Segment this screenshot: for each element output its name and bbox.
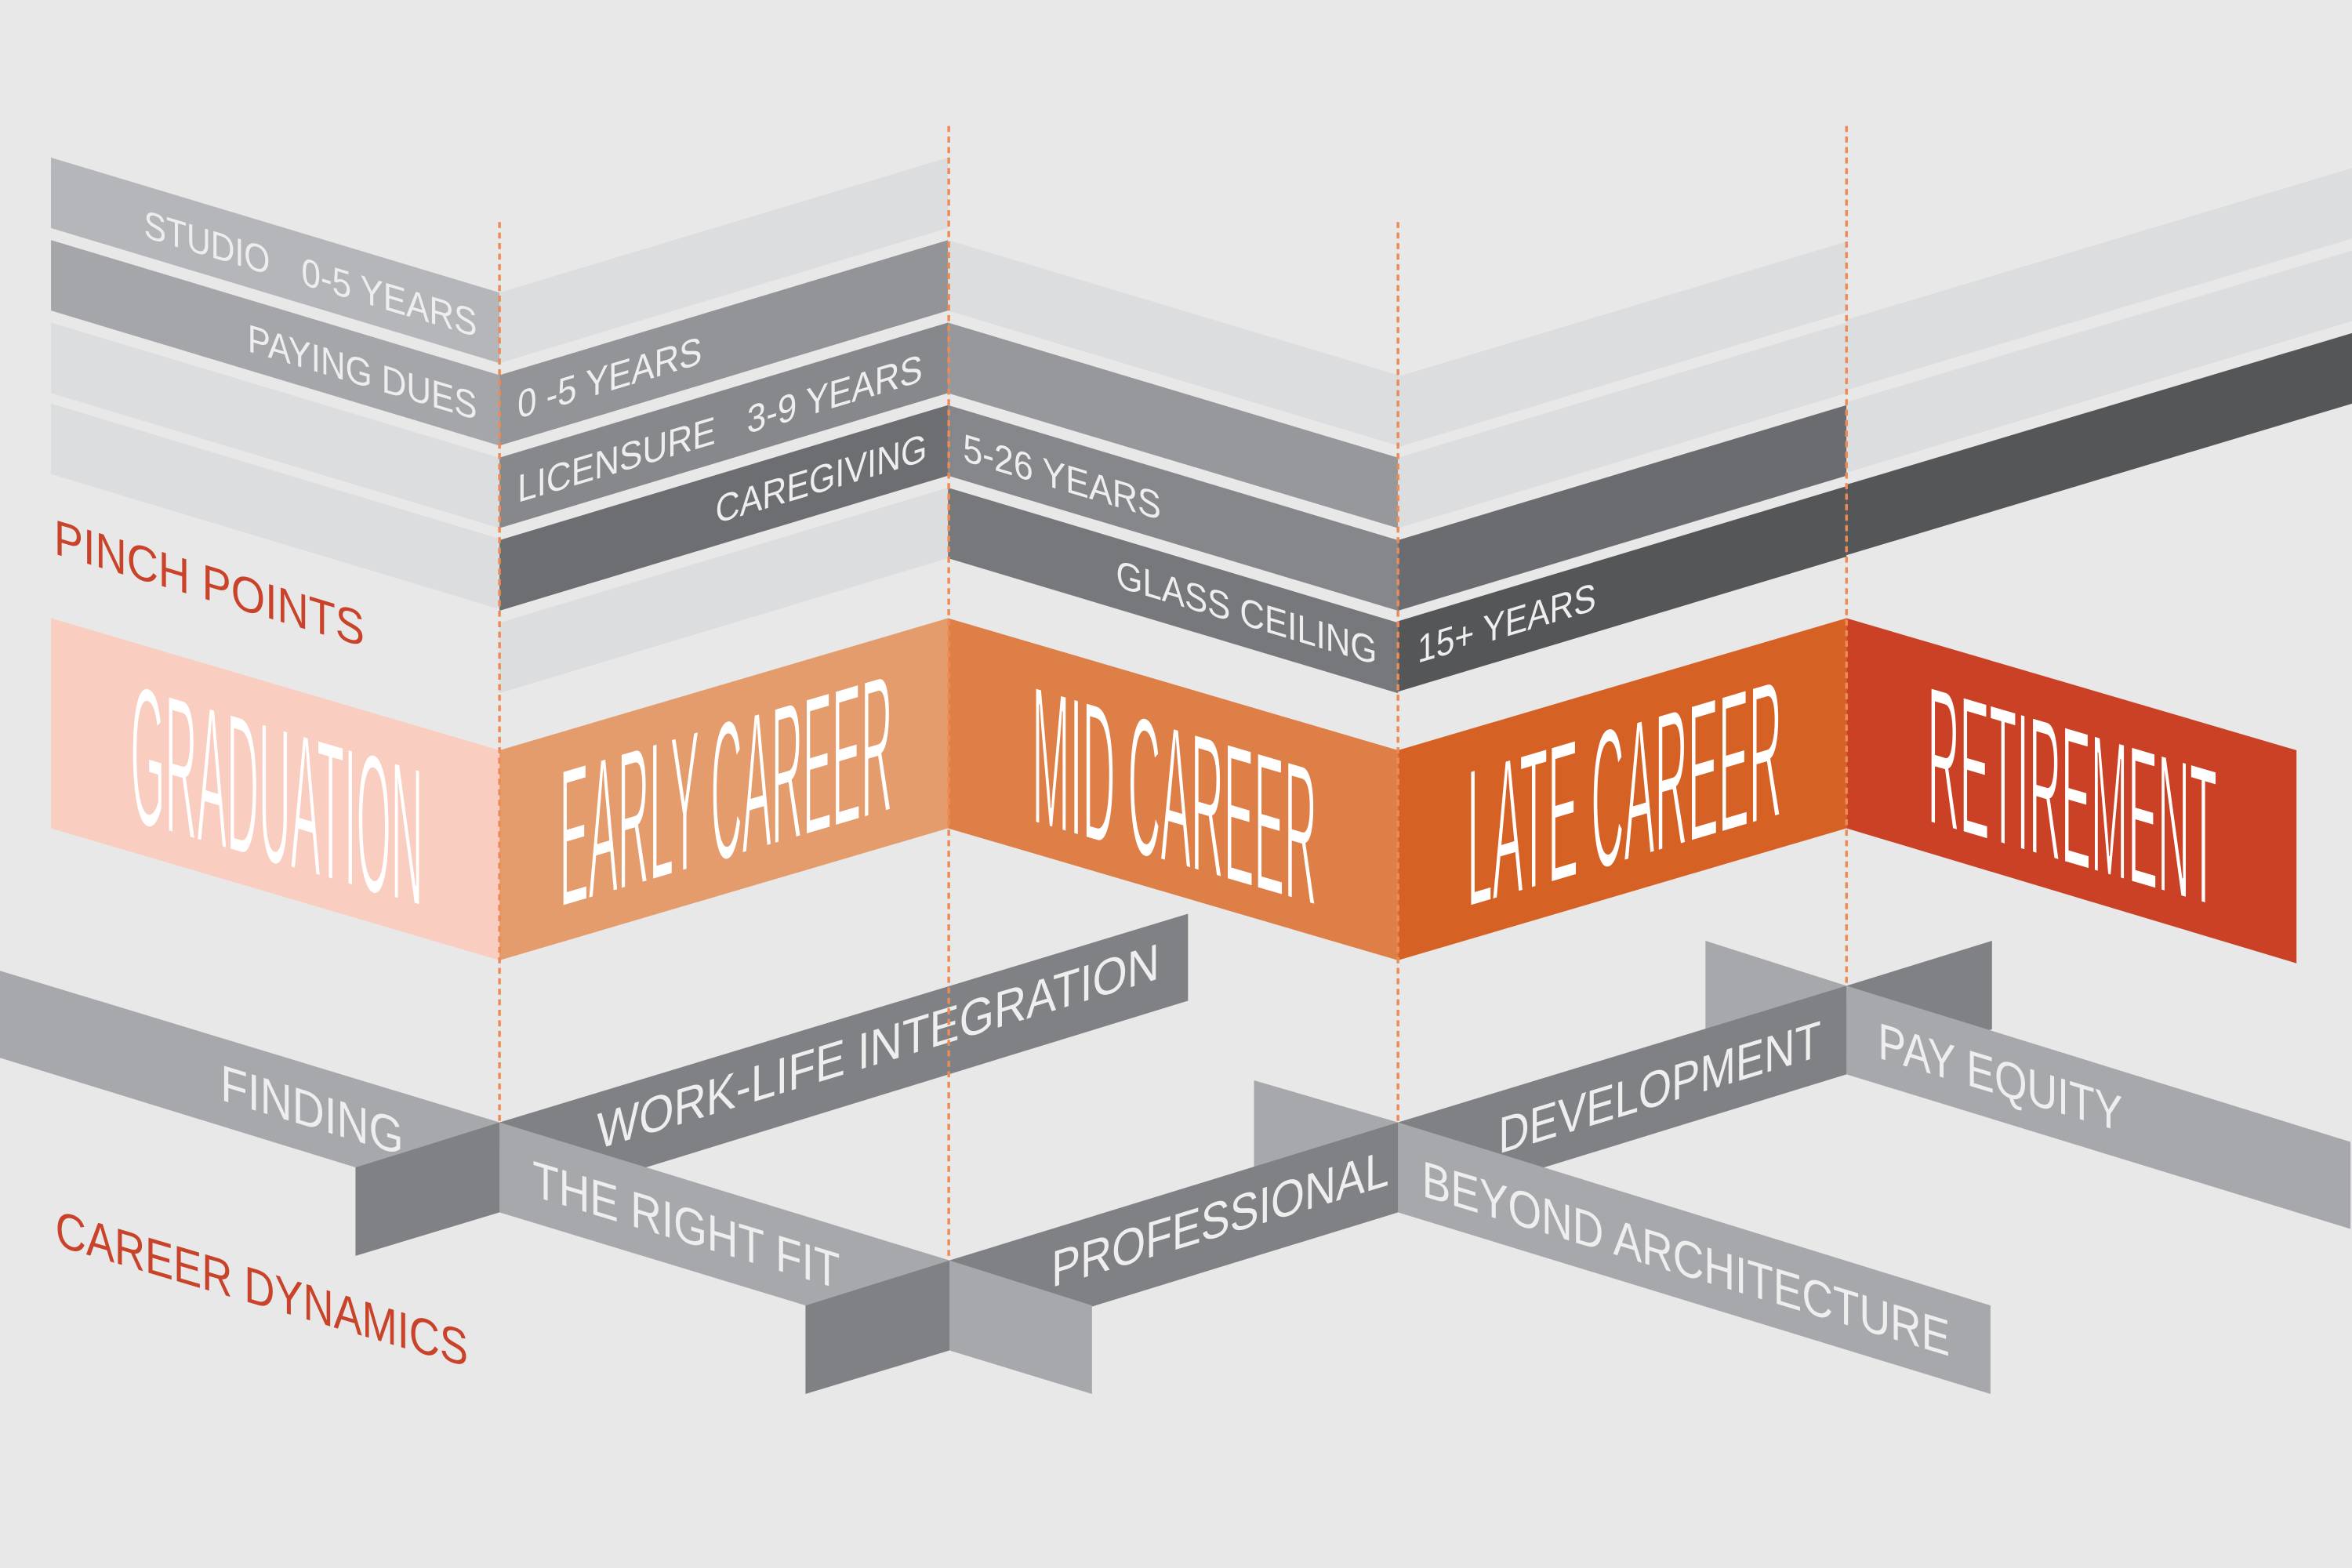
label: licensure 3-9 years: 3-9 YEARS — [747, 346, 923, 442]
label: caregiving: CAREGIVING — [716, 425, 927, 532]
label: work-life integration: WORK-LIFE INTEGRATION — [597, 933, 1160, 1161]
label: 5-26 years: 5-26 YEARS — [963, 426, 1161, 528]
label: professional: PROFESSIONAL — [1051, 1140, 1389, 1299]
label: pay equity: PAY EQUITY — [1878, 1013, 2122, 1144]
label: 15+ years: 15+ YEARS — [1417, 575, 1596, 672]
label: licensure 3-9 years — [517, 346, 923, 511]
stage: mid career — [948, 619, 1398, 960]
panel: pinch point ribbons — [51, 158, 2352, 693]
stage: graduation — [51, 619, 499, 960]
label: studio 0-5 years: STUDIO — [144, 201, 270, 283]
heading: career dynamics: CAREER DYNAMICS — [56, 1200, 468, 1378]
label: beyond architecture: BEYOND ARCHITECTURE — [1422, 1151, 1950, 1368]
text: EARLY CAREER — [560, 630, 892, 950]
stage: late career — [1398, 619, 1846, 960]
label: glass ceiling: GLASS CEILING — [1116, 551, 1377, 673]
label: the right fit: THE RIGHT FIT — [532, 1151, 840, 1301]
label: finding: FINDING — [220, 1054, 404, 1167]
panel: career stage band: GRADUATION — [130, 641, 423, 949]
stage: early career — [499, 619, 948, 960]
label: studio 0-5 years — [144, 201, 477, 346]
panel: career stage band: MID CAREER — [1032, 643, 1317, 949]
heading: pinch points: PINCH POINTS — [54, 509, 365, 658]
stage: retirement — [1846, 619, 2296, 964]
dotted stage dividers — [499, 126, 1846, 1261]
panel: career dynamics ribbons — [0, 914, 2350, 1394]
label: licensure 3-9 years: LICENSURE — [517, 408, 716, 511]
label: studio 0-5 years: 0-5 YEARS — [302, 249, 477, 346]
label: 0-5 years: 0 -5 YEARS — [517, 328, 702, 427]
label: paying dues: PAYING DUES — [248, 316, 477, 428]
label: development: DEVELOPMENT — [1498, 1011, 1821, 1165]
panel: career stage band — [51, 619, 2296, 964]
